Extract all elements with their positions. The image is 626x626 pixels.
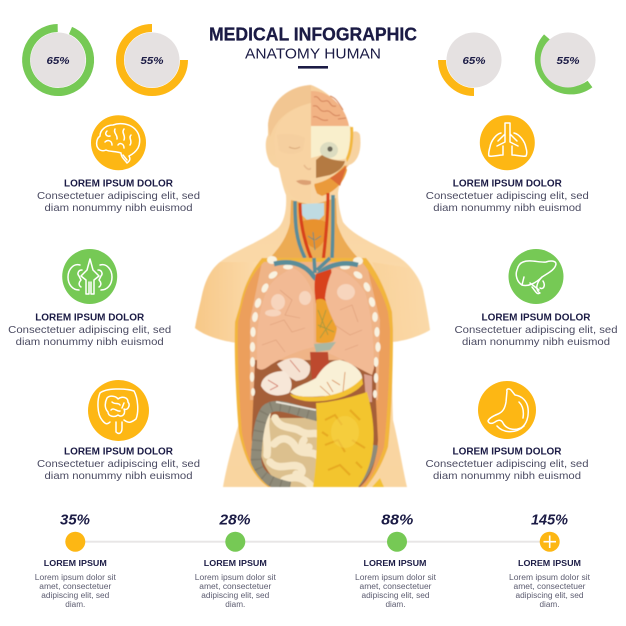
- text: LOREM IPSUM DOLOR: [453, 178, 562, 190]
- icon: lungs: [480, 115, 535, 170]
- text: [37, 178, 200, 214]
- great vessels: [274, 262, 358, 279]
- donut: green 65%: 65%: [46, 55, 70, 67]
- lung highlights: [265, 284, 355, 316]
- icon: kidneys: [62, 249, 117, 304]
- thyroid: [301, 203, 324, 221]
- timeline: [35, 512, 591, 609]
- item: lungs: [426, 115, 589, 214]
- timeline item: 28%: [195, 512, 277, 609]
- text: LOREM IPSUM DOLOR: [64, 446, 173, 458]
- lung right: [325, 268, 374, 375]
- neck cavity: [266, 198, 362, 262]
- item: stomach: [426, 381, 589, 482]
- timeline item: 35%: diam.: [65, 600, 85, 609]
- text: Consectetuer adipiscing elit, sed: [8, 324, 171, 336]
- icon: brain: [91, 115, 146, 170]
- donut: yellow 65%: 65%: [462, 55, 486, 67]
- item: intestines: [37, 380, 200, 482]
- timeline item: 28%: amet, consectetuer: [199, 582, 272, 591]
- timeline item: 28%: LOREM IPSUM: [204, 558, 267, 568]
- icon: stomach: [478, 381, 536, 439]
- text: [37, 446, 200, 482]
- icon: liver: [508, 249, 564, 304]
- timeline item: 145%: 145%: [531, 512, 568, 528]
- timeline item: 88%: adipiscing elit, sed: [362, 591, 430, 600]
- text: diam nonummy nibh euismod: [44, 202, 193, 214]
- text: diam nonummy nibh euismod: [462, 336, 610, 348]
- text: diam nonummy nibh euismod: [433, 202, 581, 214]
- timeline item: 145%: LOREM IPSUM: [518, 558, 581, 568]
- rib bones: [250, 256, 381, 398]
- timeline item: 88%: amet, consectetuer: [360, 582, 432, 591]
- text: [426, 178, 589, 214]
- timeline item: 145%: amet, consectetuer: [514, 582, 586, 591]
- timeline item: 35%: LOREM IPSUM: [44, 558, 107, 568]
- omentum fat: [313, 392, 374, 487]
- icon: intestines: [88, 380, 149, 441]
- timeline item: 88%: Lorem ipsum dolor sit: [355, 573, 437, 582]
- donut: green 65%: [26, 28, 90, 92]
- abdominal organs: [277, 358, 310, 381]
- small intestine: [260, 418, 318, 487]
- text: diam nonummy nibh euismod: [44, 470, 193, 482]
- text: Consectetuer adipiscing elit, sed: [426, 458, 589, 470]
- timeline item: 145%: [509, 512, 591, 609]
- text: LOREM IPSUM DOLOR: [452, 446, 562, 458]
- stomach and pancreas: [290, 360, 362, 397]
- eye: [320, 142, 338, 158]
- timeline item: 35%: Lorem ipsum dolor sit: [35, 573, 117, 582]
- donut: yellow 55%: [120, 28, 184, 92]
- text: LOREM IPSUM DOLOR: [64, 178, 173, 190]
- timeline item: 28%: diam.: [225, 600, 245, 609]
- timeline item: 88%: diam.: [386, 600, 406, 609]
- timeline item: 35%: 35%: [60, 512, 90, 528]
- text: [454, 312, 618, 348]
- inner cavity: [250, 262, 380, 487]
- abdominal contents: [256, 402, 374, 487]
- timeline item: 88%: 88%: [381, 512, 413, 528]
- lung left: [257, 268, 314, 370]
- right colon: [352, 445, 374, 487]
- item: kidneys: [8, 249, 171, 348]
- text: diam nonummy nibh euismod: [16, 336, 164, 348]
- donut: green 55%: [539, 32, 596, 90]
- timeline item: 35%: amet, consectetuer: [39, 582, 112, 591]
- colon: [256, 406, 318, 487]
- heart: [316, 299, 337, 343]
- donut: yellow 55%: 55%: [140, 55, 164, 67]
- timeline item: 145%: diam.: [540, 600, 560, 609]
- text: Consectetuer adipiscing elit, sed: [454, 324, 618, 336]
- timeline item: 35%: adipiscing elit, sed: [41, 591, 109, 600]
- chest cavity rim: [235, 258, 393, 487]
- neck vessels: [295, 195, 333, 258]
- brain: [311, 91, 349, 126]
- donut: green 55%: 55%: [556, 55, 580, 67]
- timeline item: 88%: [355, 512, 437, 609]
- text: Consectetuer adipiscing elit, sed: [426, 190, 589, 202]
- item: brain: [37, 115, 200, 214]
- text: LOREM IPSUM DOLOR: [482, 312, 591, 324]
- text: diam nonummy nibh euismod: [433, 470, 581, 482]
- timeline item: 145%: Lorem ipsum dolor sit: [509, 573, 591, 582]
- title: [209, 24, 417, 69]
- text: LOREM IPSUM DOLOR: [35, 312, 145, 324]
- item: liver: [454, 249, 618, 348]
- text: Consectetuer adipiscing elit, sed: [37, 190, 200, 202]
- diaphragm shelf: [314, 342, 336, 352]
- text: Consectetuer adipiscing elit, sed: [37, 458, 200, 470]
- timeline item: 28%: 28%: [218, 512, 251, 528]
- timeline item: 28%: Lorem ipsum dolor sit: [195, 573, 277, 582]
- text: [426, 446, 589, 482]
- timeline item: 88%: LOREM IPSUM: [364, 558, 426, 568]
- title: ANATOMY HUMAN: [245, 46, 381, 62]
- donut: yellow 65%: [442, 32, 502, 92]
- text: [8, 312, 171, 348]
- timeline item: 28%: adipiscing elit, sed: [201, 591, 269, 600]
- timeline item: 145%: adipiscing elit, sed: [516, 591, 584, 600]
- title: MEDICAL INFOGRAPHIC: [209, 24, 417, 44]
- anatomy torso model: [195, 85, 430, 487]
- face muscle: [311, 158, 318, 178]
- timeline item: 35%: [35, 512, 117, 609]
- skull bone: [311, 126, 352, 160]
